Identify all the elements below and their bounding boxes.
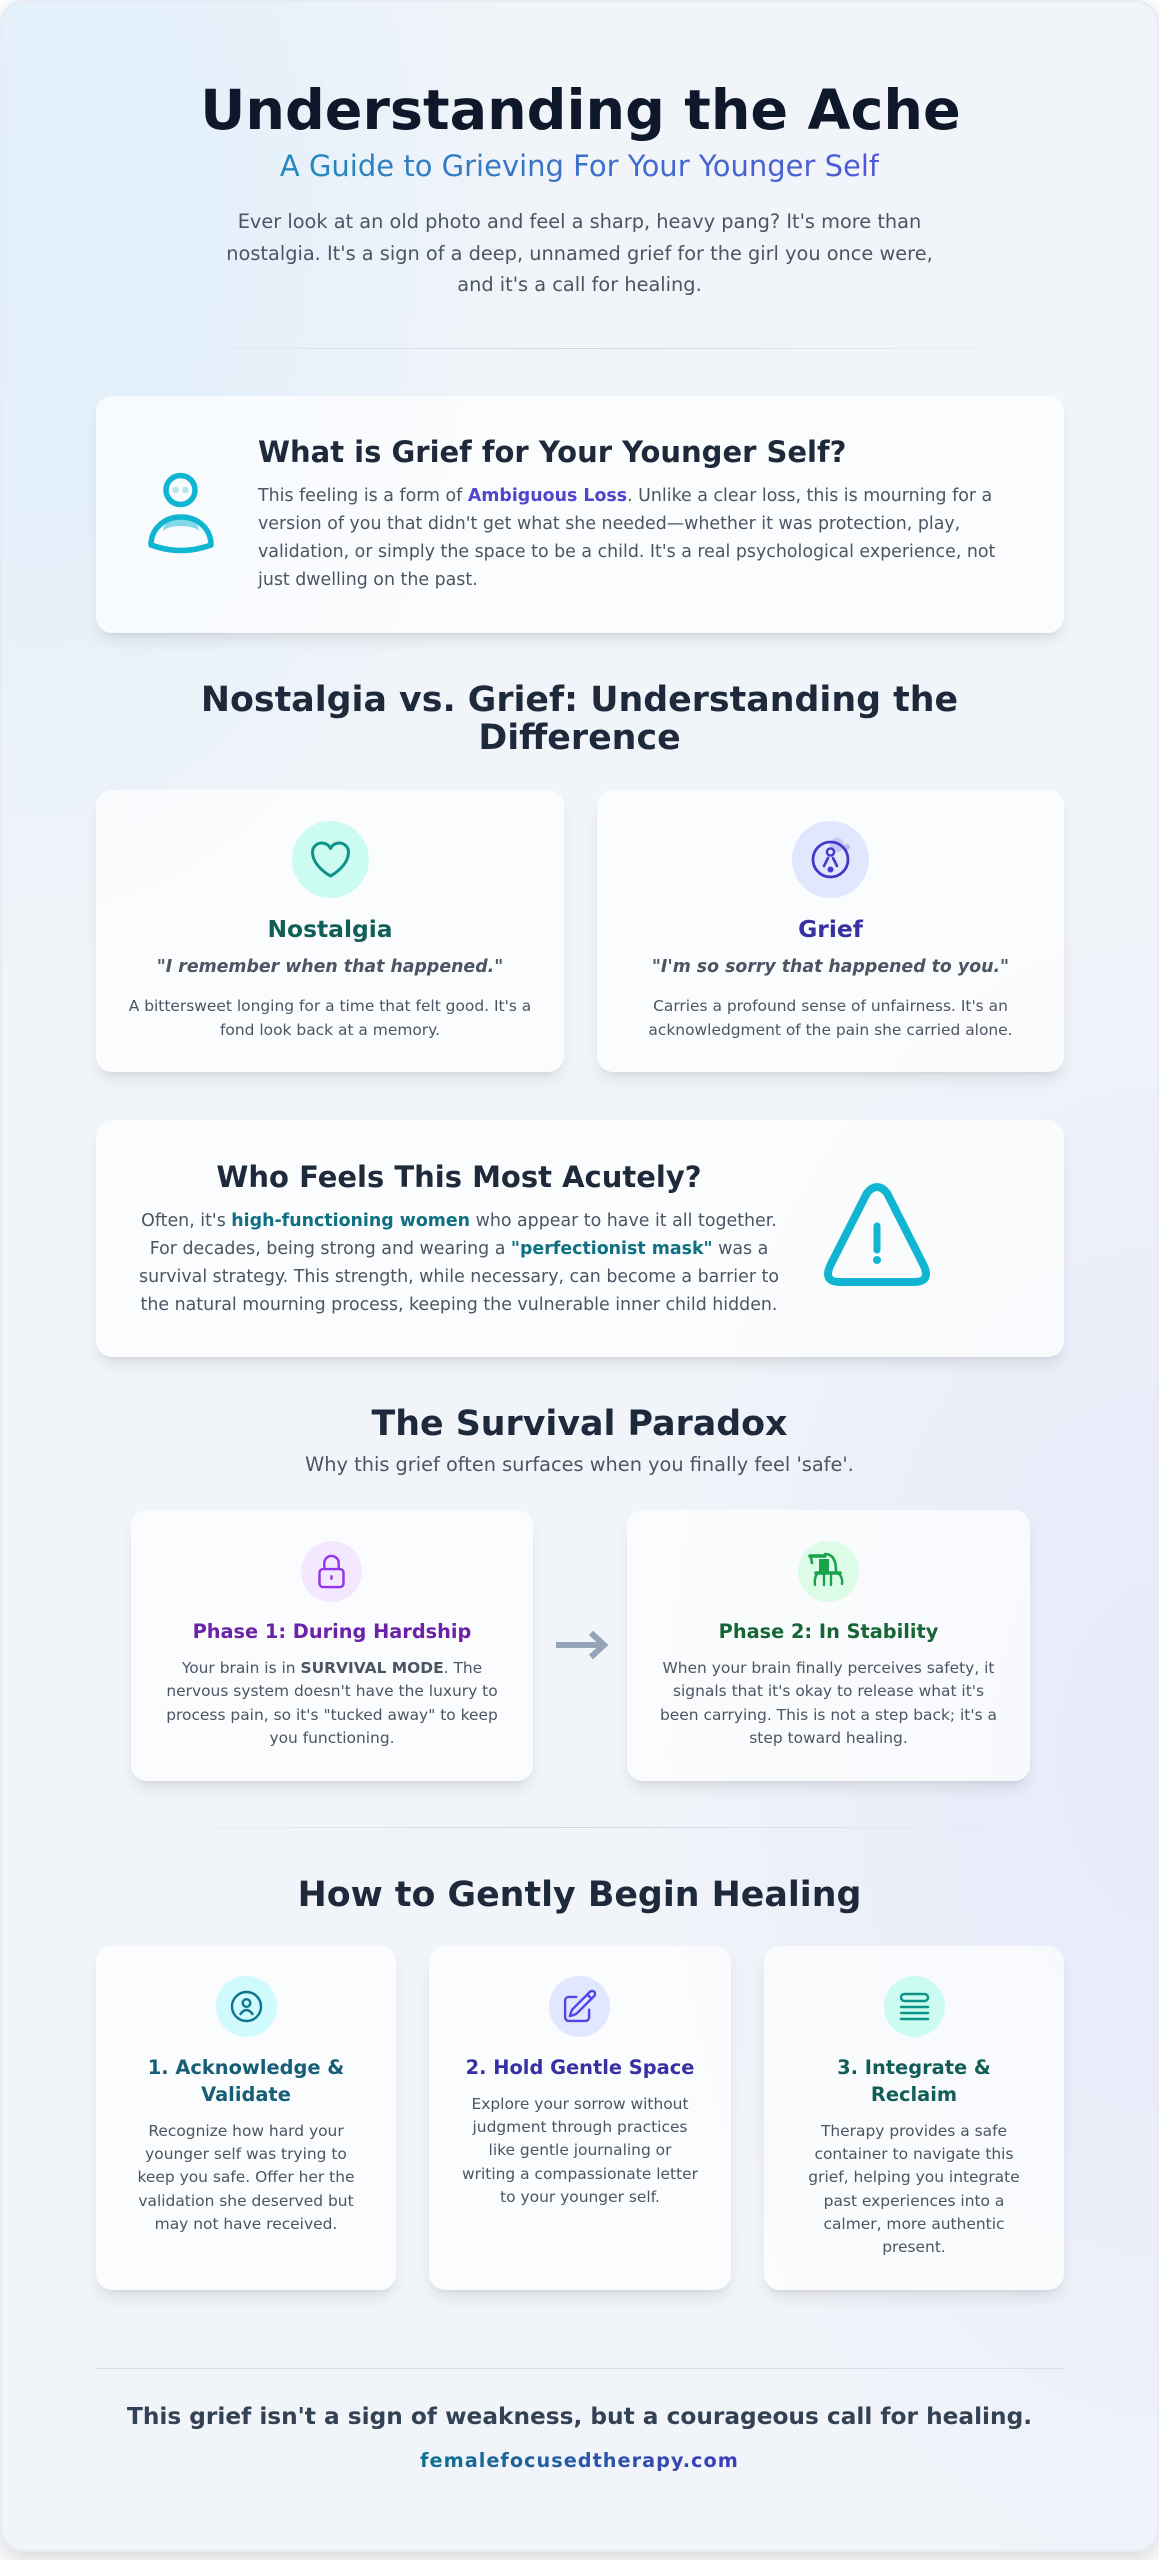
body text: the natural mourning process, keeping the vulnerable inner child hidden. bbox=[141, 1295, 777, 1315]
heading: Who Feels This Most Acutely? bbox=[216, 1160, 702, 1194]
body text: survival strategy. This strength, while necessary, can become a barrier to bbox=[139, 1267, 779, 1287]
body text bbox=[258, 486, 995, 590]
description bbox=[166, 1658, 498, 1747]
description: present. bbox=[882, 2238, 946, 2256]
heading: 3. Integrate & bbox=[837, 2056, 991, 2079]
description bbox=[128, 997, 531, 1038]
intro text bbox=[226, 210, 933, 296]
body text: Often, it's high-functioning women who appear to have it all together. bbox=[141, 1211, 777, 1231]
icon: stability bbox=[798, 1541, 859, 1602]
heading: 1. Acknowledge & bbox=[148, 2056, 344, 2079]
description: Explore your sorrow without bbox=[471, 2095, 689, 2113]
description: judgment through practices bbox=[472, 2118, 687, 2136]
footer website: femalefocusedtherapy.com bbox=[420, 2449, 739, 2472]
icon: heart bbox=[292, 821, 368, 898]
panel: step 2 bbox=[429, 1946, 731, 2290]
description: When your brain finally perceives safety, it bbox=[662, 1658, 994, 1676]
description: Recognize how hard your bbox=[148, 2122, 344, 2140]
heading bbox=[148, 2056, 344, 2106]
heading: What is Grief for Your Younger Self? bbox=[258, 435, 846, 469]
footer message: This grief isn't a sign of weakness, but a courageous call for healing. bbox=[127, 2402, 1032, 2430]
heading: Nostalgia bbox=[267, 914, 393, 942]
icon: grief inner child bbox=[792, 821, 869, 898]
description: to your younger self. bbox=[500, 2188, 660, 2206]
panel: phase 2 bbox=[627, 1510, 1030, 1781]
description: fond look back at a memory. bbox=[220, 1020, 440, 1038]
heading: nostalgia vs grief bbox=[201, 680, 958, 758]
intro text: and it's a call for healing. bbox=[457, 273, 702, 296]
description: signals that it's okay to release what it's bbox=[673, 1682, 984, 1700]
body text: validation, or simply the space to be a child. It's a real psychological experience, not bbox=[258, 542, 995, 562]
description: Your brain is in SURVIVAL MODE. The bbox=[182, 1658, 482, 1676]
description: nervous system doesn't have the luxury to bbox=[166, 1682, 498, 1700]
icon: warning triangle bbox=[824, 1183, 930, 1286]
description: you functioning. bbox=[269, 1729, 395, 1747]
panel: step 1 bbox=[96, 1946, 396, 2290]
panel: nostalgia bbox=[96, 790, 564, 1072]
icon: person circle bbox=[216, 1976, 277, 2037]
body text: This feeling is a form of Ambiguous Loss. Unlike a clear loss, this is mourning for a bbox=[258, 486, 992, 506]
intro text: nostalgia. It's a sign of a deep, unnamed grief for the girl you once were, bbox=[226, 242, 933, 265]
description: process pain, so it's "tucked away" to keep bbox=[166, 1706, 498, 1724]
description bbox=[660, 1658, 997, 1747]
icon: lock bbox=[301, 1541, 362, 1602]
description: grief, helping you integrate bbox=[808, 2168, 1020, 2186]
body text: just dwelling on the past. bbox=[258, 570, 478, 590]
body text: For decades, being strong and wearing a "perfectionist mask" was a bbox=[150, 1239, 768, 1259]
description bbox=[462, 2095, 698, 2206]
description bbox=[808, 2122, 1020, 2256]
description: A bittersweet longing for a time that felt good. It's a bbox=[129, 997, 531, 1015]
body text: version of you that didn't get what she needed—whether it was protection, play, bbox=[258, 514, 960, 534]
description: keep you safe. Offer her the bbox=[137, 2168, 355, 2186]
quote: "I'm so sorry that happened to you." bbox=[652, 957, 1009, 977]
description: calmer, more authentic bbox=[823, 2215, 1005, 2233]
heading: survival paradox: The Survival Paradox bbox=[372, 1404, 787, 1444]
description: past experiences into a bbox=[824, 2192, 1004, 2210]
heading: nostalgia vs grief: Difference bbox=[478, 718, 681, 758]
icon: stacked lines bbox=[884, 1976, 945, 2037]
description: younger self was trying to bbox=[145, 2145, 347, 2163]
description: step toward healing. bbox=[749, 1729, 908, 1747]
heading: Reclaim bbox=[871, 2083, 957, 2106]
description: like gentle journaling or bbox=[489, 2141, 671, 2159]
heading bbox=[837, 2056, 991, 2106]
heading: nostalgia vs grief: Nostalgia vs. Grief: Understanding the bbox=[201, 680, 958, 720]
description: Carries a profound sense of unfairness. It's an bbox=[653, 997, 1008, 1015]
description: may not have received. bbox=[155, 2215, 337, 2233]
heading: Phase 1: During Hardship bbox=[193, 1620, 471, 1642]
description: writing a compassionate letter bbox=[462, 2165, 698, 2183]
description: acknowledgment of the pain she carried alone. bbox=[648, 1020, 1013, 1038]
panel: grief bbox=[597, 790, 1064, 1072]
icon: younger self person bbox=[148, 472, 214, 554]
heading: Phase 2: In Stability bbox=[719, 1620, 938, 1642]
panel: phase 1 bbox=[131, 1510, 533, 1781]
title: Understanding the Ache bbox=[200, 78, 961, 142]
panel: what is grief bbox=[96, 396, 1064, 633]
description bbox=[137, 2122, 355, 2233]
description bbox=[648, 997, 1013, 1038]
heading: Grief bbox=[798, 914, 863, 942]
panel: step 3 bbox=[764, 1946, 1064, 2290]
description: validation she deserved but bbox=[138, 2192, 354, 2210]
icon: pencil square bbox=[549, 1976, 610, 2037]
description: container to navigate this bbox=[814, 2145, 1014, 2163]
subtitle: A Guide to Grieving For Your Younger Self bbox=[280, 149, 879, 183]
intro text: Ever look at an old photo and feel a sharp, heavy pang? It's more than bbox=[238, 210, 921, 233]
body text bbox=[139, 1211, 779, 1315]
panel: who feels this bbox=[96, 1120, 1064, 1357]
description: been carrying. This is not a step back; it's a bbox=[660, 1706, 997, 1724]
arrow bbox=[556, 1630, 608, 1660]
heading: healing: How to Gently Begin Healing bbox=[298, 1874, 861, 1914]
heading: 2. Hold Gentle Space bbox=[466, 2056, 694, 2079]
description: Therapy provides a safe bbox=[821, 2122, 1007, 2140]
quote: "I remember when that happened." bbox=[157, 957, 503, 977]
subheading: Why this grief often surfaces when you finally feel 'safe'. bbox=[305, 1453, 854, 1476]
heading: Validate bbox=[201, 2083, 291, 2106]
